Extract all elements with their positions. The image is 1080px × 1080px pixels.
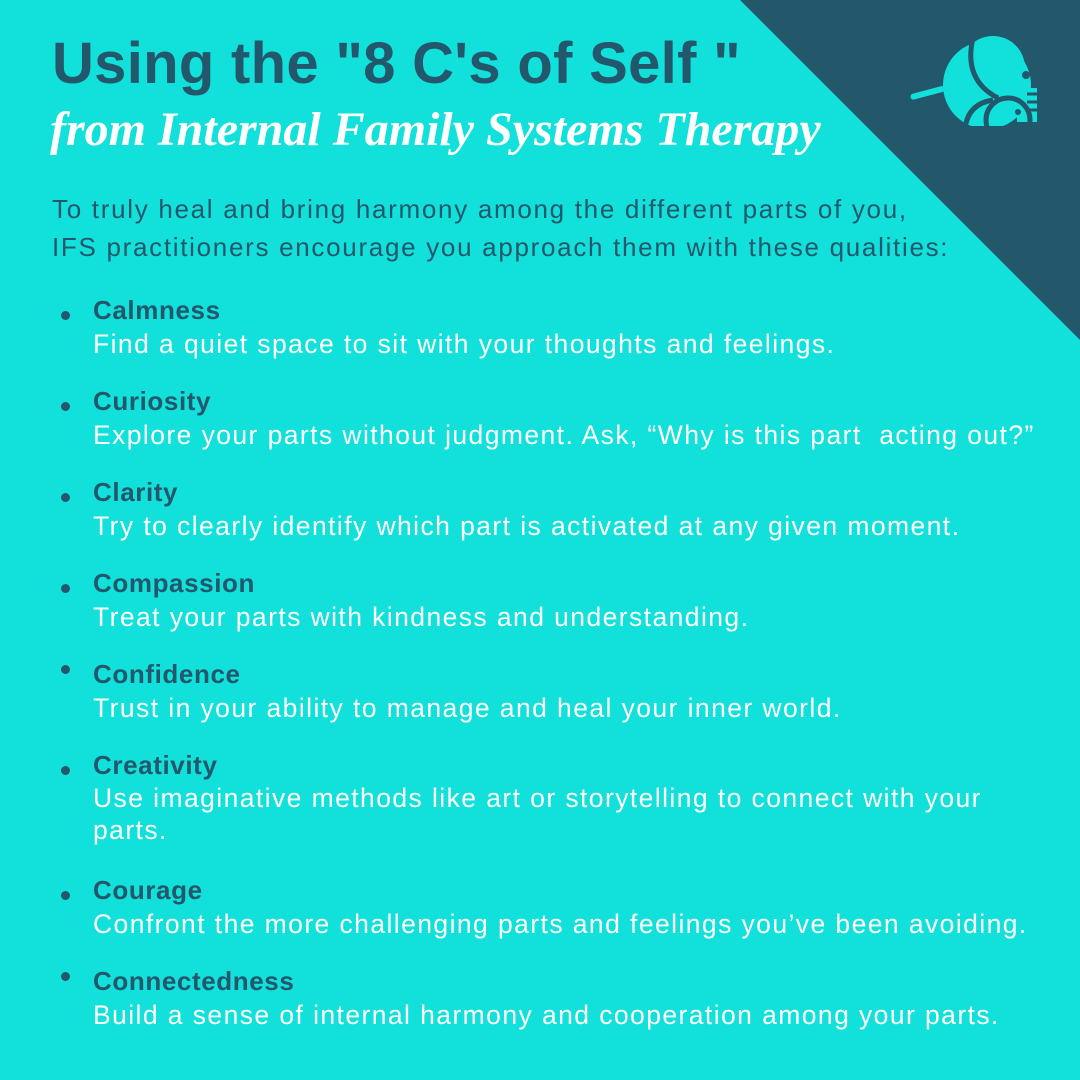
item: Creativity: parts. xyxy=(93,815,168,845)
item: Clarity: Clarity xyxy=(93,477,178,507)
item: Connectedness xyxy=(61,966,1000,1030)
intro text: IFS practitioners encourage you approach them with these qualities: xyxy=(52,232,949,262)
item: Confidence: Confidence xyxy=(93,659,241,689)
item: Courage: Courage xyxy=(93,875,203,905)
item: Compassion: Treat your parts with kindness and understanding. xyxy=(93,602,749,632)
item: Curiosity: Explore your parts without judgment. Ask, “Why is this part acting out?” xyxy=(93,420,1035,450)
icon: elephant logo xyxy=(910,36,1037,126)
subtitle: from Internal Family Systems Therapy xyxy=(50,103,821,156)
item: Confidence xyxy=(61,659,842,723)
item: Calmness: Calmness xyxy=(93,295,221,325)
item: Calmness: Find a quiet space to sit with your thoughts and feelings. xyxy=(93,329,835,359)
item: Curiosity xyxy=(61,386,1035,450)
list: 8 C's xyxy=(61,295,1035,1030)
item: Connectedness: Build a sense of internal harmony and cooperation among your parts. xyxy=(93,1000,1000,1030)
item: Calmness xyxy=(61,295,835,359)
item: Connectedness: Connectedness xyxy=(93,966,294,996)
title: Using the "8 C's of Self " xyxy=(52,31,741,96)
intro text xyxy=(52,194,949,262)
item: Creativity: Use imaginative methods like art or storytelling to connect with your xyxy=(93,783,982,813)
item: Clarity: Try to clearly identify which part is activated at any given moment. xyxy=(93,511,960,541)
item: Compassion xyxy=(61,568,749,632)
item: Curiosity: Curiosity xyxy=(93,386,211,416)
item: Confidence: Trust in your ability to manage and heal your inner world. xyxy=(93,693,842,723)
item: Creativity: Creativity xyxy=(93,750,218,780)
item: Creativity xyxy=(61,750,982,845)
item: Compassion: Compassion xyxy=(93,568,255,598)
item: Clarity xyxy=(61,477,960,541)
item: Courage xyxy=(61,875,1028,939)
item: Courage: Confront the more challenging parts and feelings you’ve been avoiding. xyxy=(93,909,1028,939)
intro text: To truly heal and bring harmony among the different parts of you, xyxy=(52,194,908,224)
